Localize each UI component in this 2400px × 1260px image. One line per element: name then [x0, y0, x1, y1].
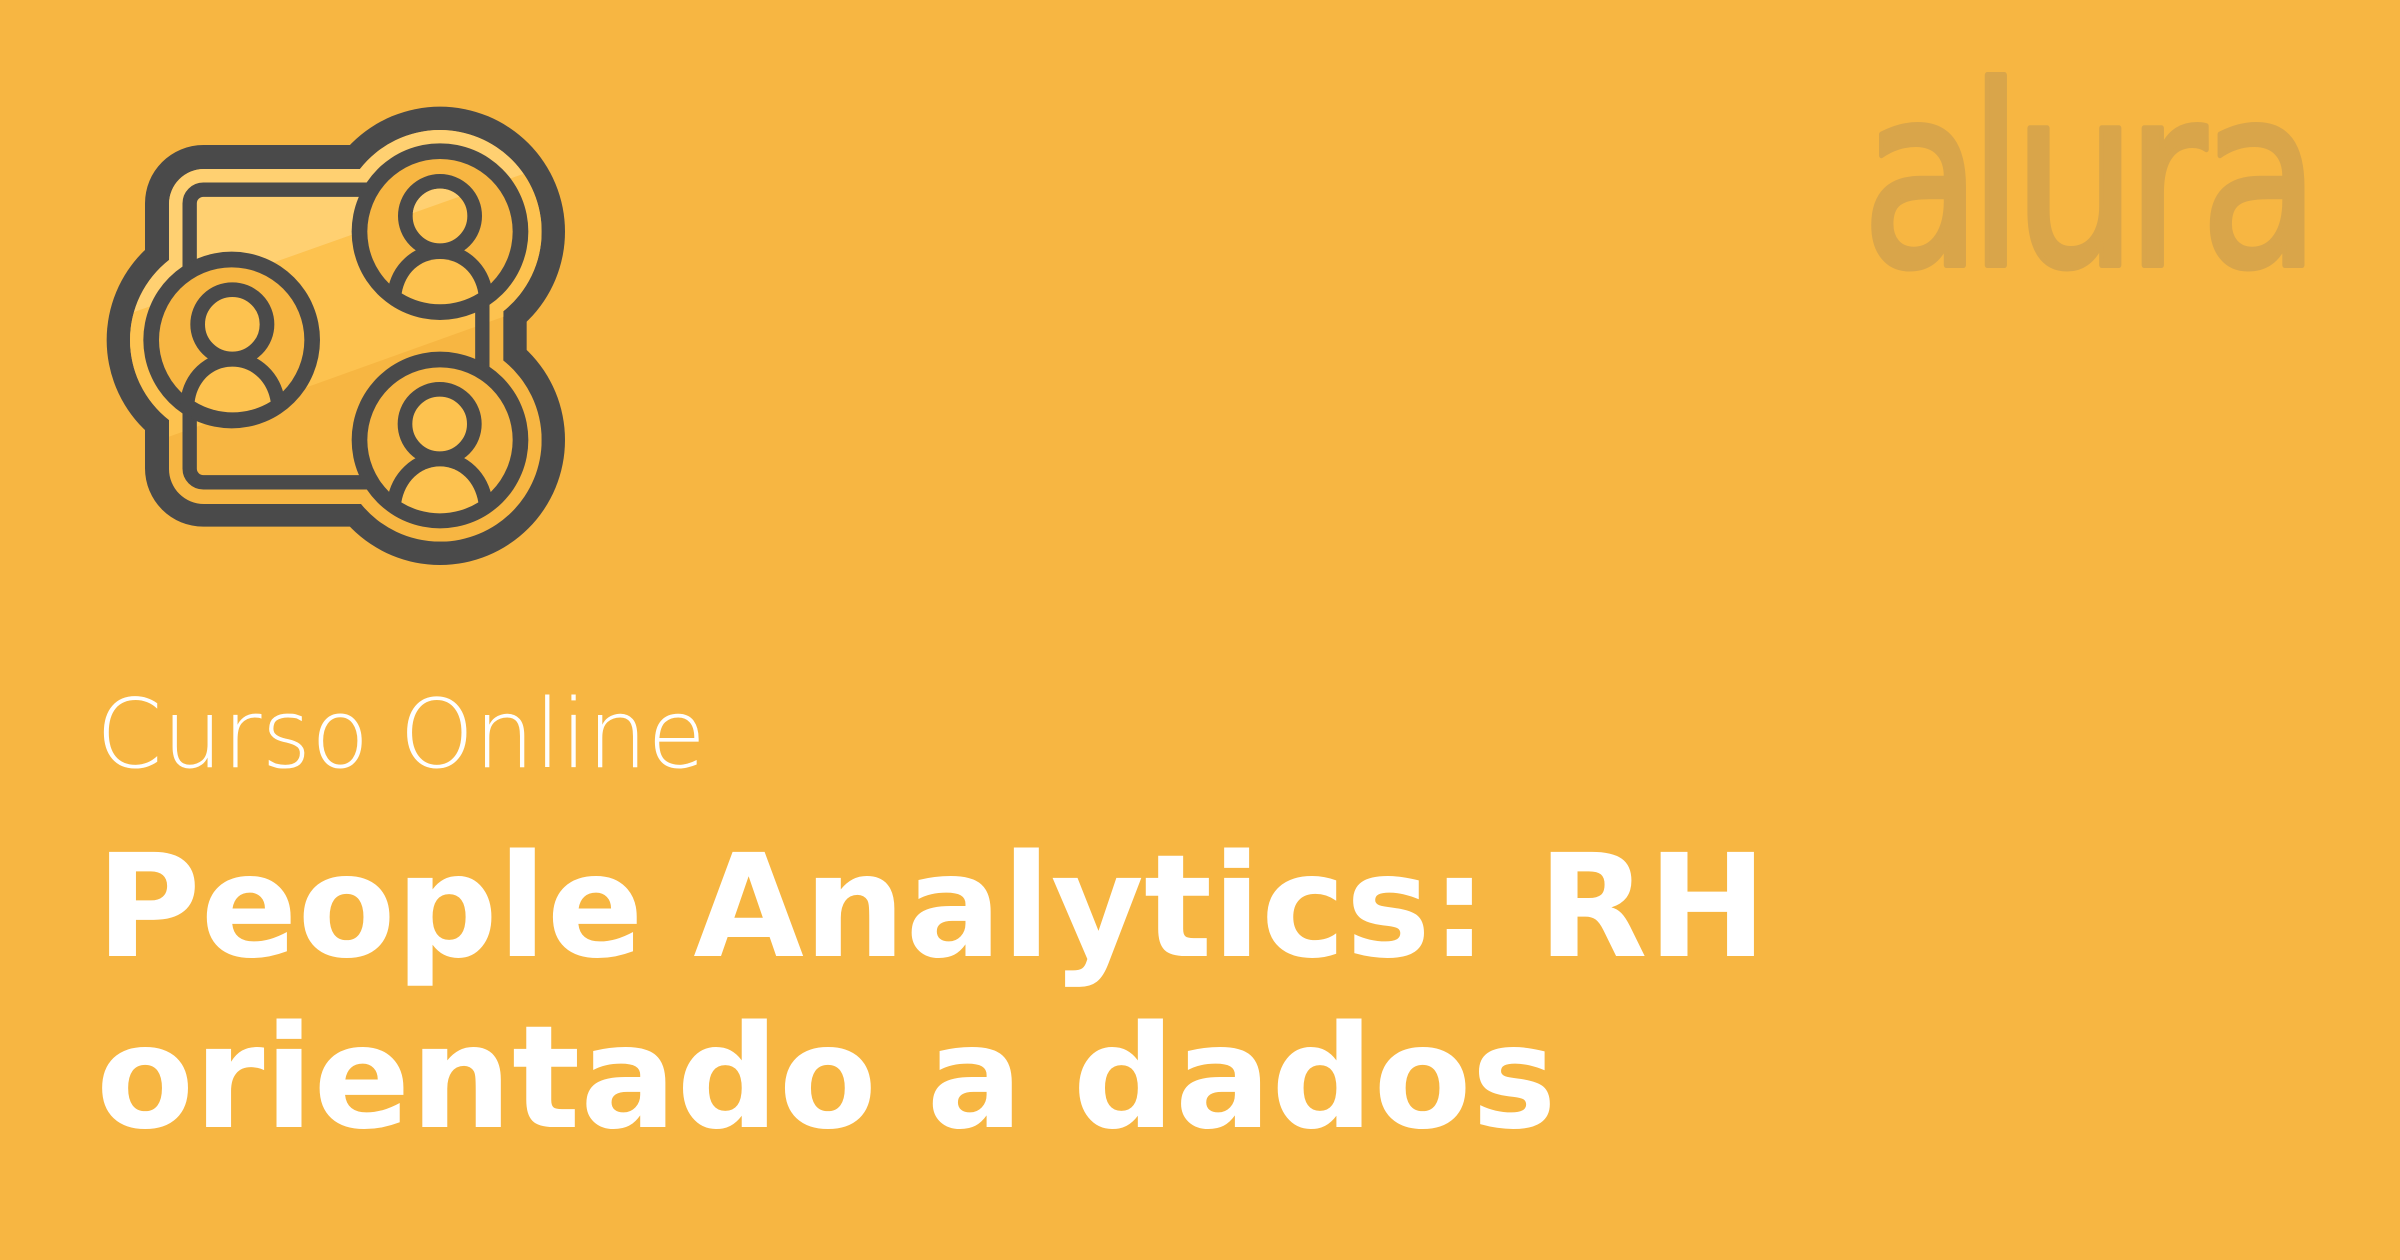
subtitle: Curso Online: Curso Online	[96, 680, 706, 790]
title: People Analytics: RH orientado a dados: People Analytics: RH	[96, 823, 1767, 990]
icon: person top right	[352, 143, 528, 320]
icon: person bottom right	[352, 352, 528, 528]
icon: people network badge	[106, 106, 565, 565]
icon inner frame	[190, 190, 482, 482]
logo: alura: alura	[1862, 33, 2320, 324]
icon glossy colour bands	[130, 130, 542, 542]
icon: person left	[143, 252, 320, 428]
icon outer dark silhouette	[107, 107, 565, 565]
title: People Analytics: RH orientado a dados: orientado a dados	[96, 994, 1557, 1161]
